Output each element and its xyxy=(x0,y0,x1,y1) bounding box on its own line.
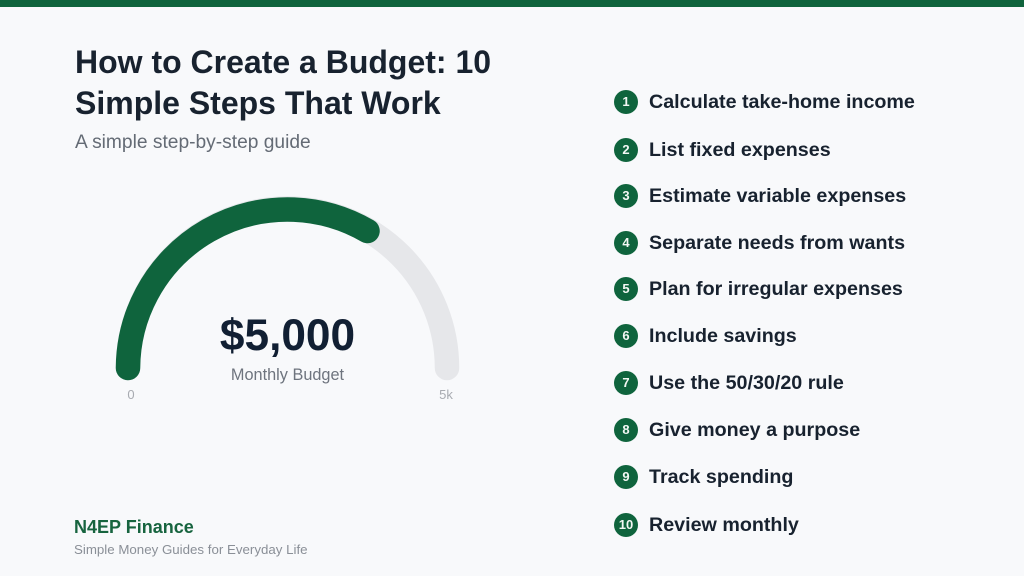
step 8: 8 xyxy=(622,422,630,437)
step 9: 9 xyxy=(622,469,630,484)
step 7: 7 xyxy=(622,375,630,390)
gauge label: Monthly Budget xyxy=(231,366,345,384)
step 1: 1 xyxy=(622,94,630,109)
step 8: Give money a purpose xyxy=(649,419,860,441)
gauge minimum: 0 xyxy=(127,387,135,402)
step 2: 2 xyxy=(622,142,630,157)
subtitle: A simple step-by-step guide xyxy=(75,132,311,153)
step 9: Track spending xyxy=(649,466,793,488)
gauge track xyxy=(128,208,447,368)
title xyxy=(75,44,491,121)
step 5: Plan for irregular expenses xyxy=(649,278,903,300)
gauge value arc xyxy=(128,209,368,368)
step 6: 6 xyxy=(622,328,630,343)
brand tagline: Simple Money Guides for Everyday Life xyxy=(74,542,308,557)
title: How to Create a Budget: 10 xyxy=(75,44,491,80)
gauge maximum: 5k xyxy=(439,387,453,402)
step 5: 5 xyxy=(622,281,630,296)
brand name: N4EP Finance xyxy=(74,517,194,537)
step 3: Estimate variable expenses xyxy=(649,185,906,207)
gauge value: $5,000 xyxy=(220,311,355,360)
step 3: 3 xyxy=(622,188,630,203)
step 10: 10 xyxy=(619,517,633,532)
step 10: Review monthly xyxy=(649,514,799,536)
step 7: Use the 50/30/20 rule xyxy=(649,372,844,394)
title: Simple Steps That Work xyxy=(75,85,441,121)
step 4: Separate needs from wants xyxy=(649,232,905,254)
gauge chart xyxy=(116,196,460,402)
step 2: List fixed expenses xyxy=(649,139,831,161)
step 4: 4 xyxy=(622,235,630,250)
step 1: Calculate take-home income xyxy=(649,91,915,113)
step 6: Include savings xyxy=(649,325,797,347)
top bar xyxy=(0,0,1024,7)
